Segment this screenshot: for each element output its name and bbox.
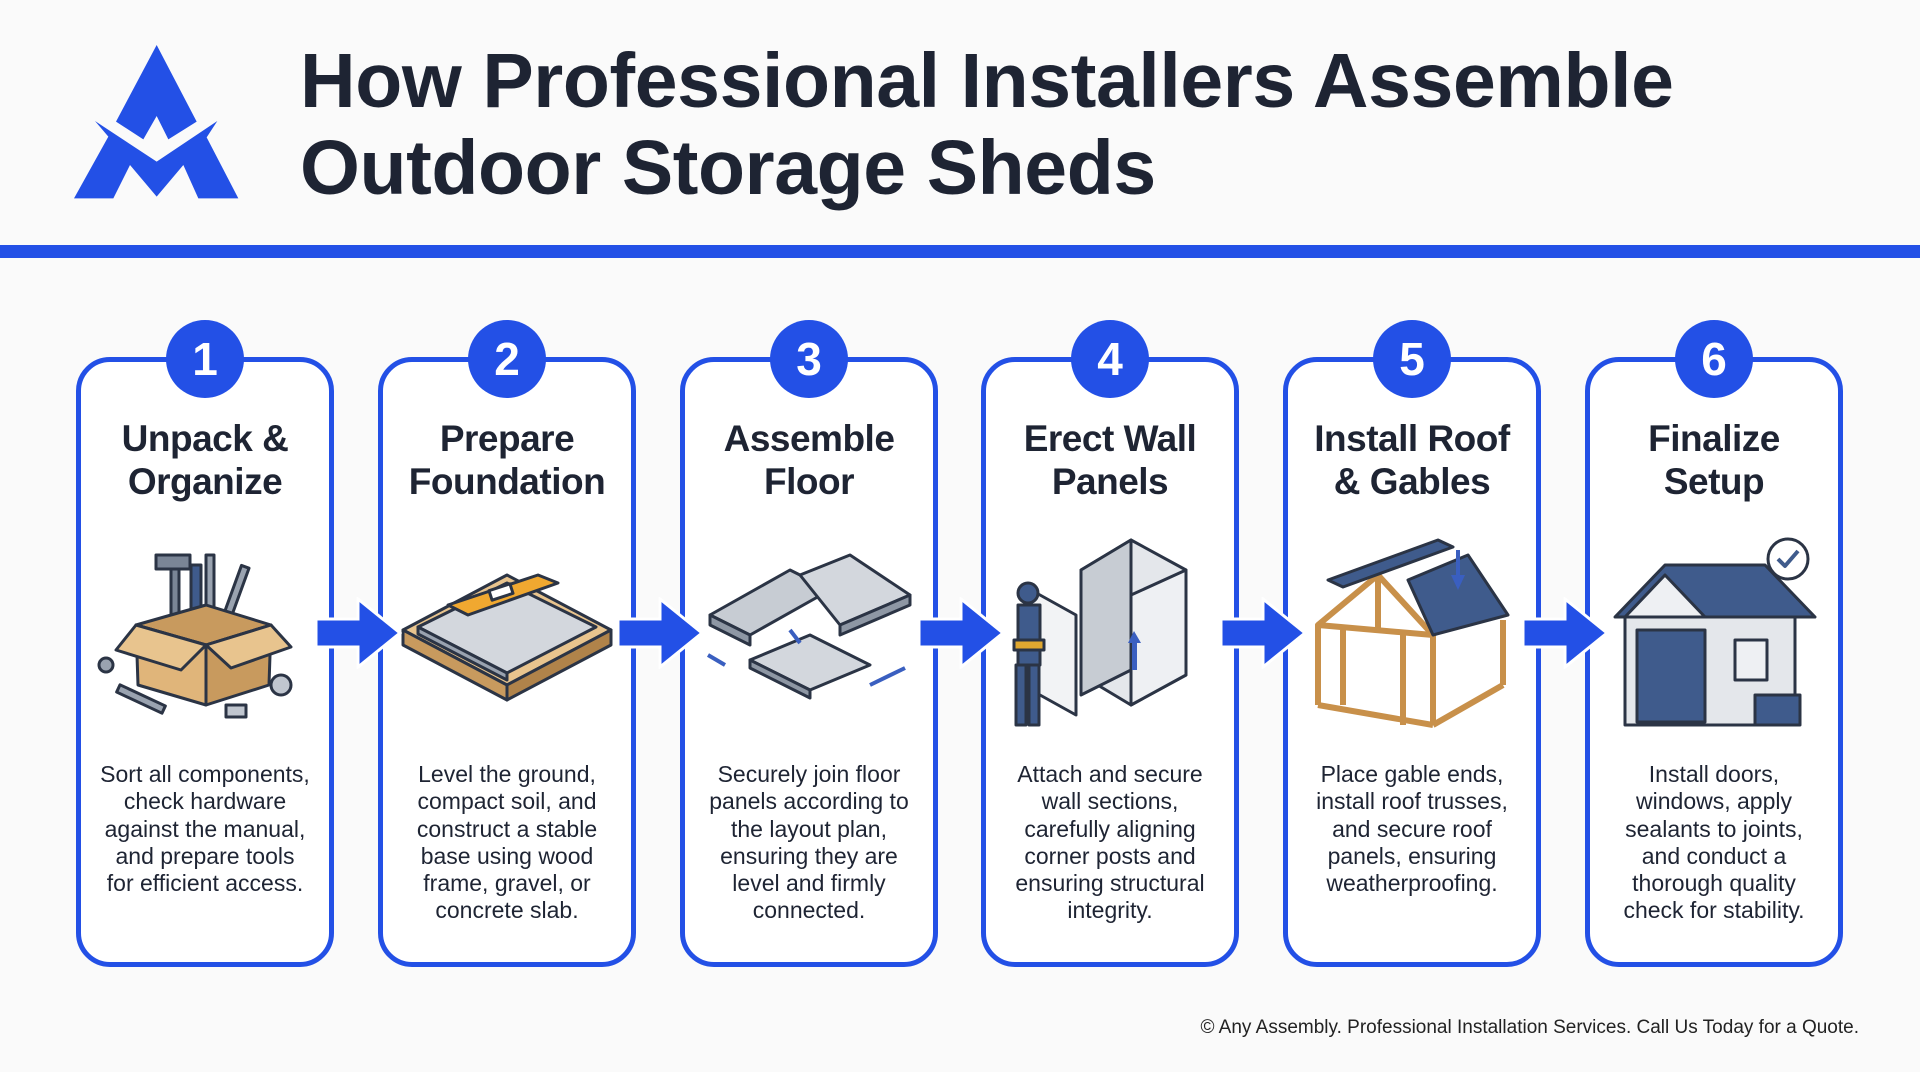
step number 5 <box>1373 320 1451 398</box>
arrow 5 <box>1524 602 1605 664</box>
description 5: panels, ensuring <box>1328 843 1496 869</box>
description 4: wall sections, <box>1042 788 1178 814</box>
step title 2 <box>409 418 605 502</box>
description 5: Place gable ends, <box>1321 761 1503 787</box>
step number 3 <box>770 320 848 398</box>
arrow 3 <box>920 602 1001 664</box>
description 2: concrete slab. <box>435 897 579 923</box>
description 5: and secure roof <box>1332 816 1492 842</box>
description 6: Install doors, <box>1649 761 1779 787</box>
description 3: the layout plan, <box>731 816 887 842</box>
description 3: ensuring they are <box>720 843 898 869</box>
description 5: weatherproofing. <box>1326 870 1498 896</box>
description 5 <box>1316 761 1508 896</box>
step title 1: Organize <box>128 461 282 502</box>
step number 5: 5 <box>1399 333 1425 385</box>
step title 6: Finalize <box>1648 418 1780 459</box>
step number 4 <box>1071 320 1149 398</box>
icon: foundation with level <box>401 574 613 702</box>
description 6: sealants to joints, <box>1625 816 1803 842</box>
step title 6: Setup <box>1664 461 1764 502</box>
description 6: check for stability. <box>1623 897 1805 923</box>
step title 2: Foundation <box>409 461 605 502</box>
icon: floor panels <box>707 554 912 700</box>
title <box>300 38 1674 211</box>
step title 1: Unpack & <box>122 418 288 459</box>
step number 2 <box>468 320 546 398</box>
description 3 <box>709 761 909 923</box>
panel: step 5 <box>1283 357 1541 967</box>
description 3: connected. <box>753 897 865 923</box>
description 4: Attach and secure <box>1017 761 1203 787</box>
description 1: for efficient access. <box>107 870 303 896</box>
step title 4 <box>1024 418 1196 502</box>
step title 5 <box>1314 418 1510 502</box>
description 3: Securely join floor <box>718 761 900 787</box>
description 2: compact soil, and <box>418 788 596 814</box>
step number 2: 2 <box>494 333 520 385</box>
description 1: against the manual, <box>105 816 305 842</box>
step title 5: Install Roof <box>1314 418 1510 459</box>
description 4 <box>1015 761 1205 923</box>
description 2: Level the ground, <box>418 761 596 787</box>
description 4: integrity. <box>1067 897 1153 923</box>
logo <box>74 45 238 198</box>
icon: roof trusses <box>1315 538 1510 728</box>
step number 6 <box>1675 320 1753 398</box>
description 6: thorough quality <box>1632 870 1796 896</box>
panel: step 2 <box>378 357 636 967</box>
icon: finished shed <box>1614 538 1817 726</box>
description 6 <box>1623 761 1805 923</box>
description 2: construct a stable <box>417 816 597 842</box>
step title 3 <box>724 418 894 502</box>
icon: box with tools <box>98 554 293 718</box>
description 1: and prepare tools <box>115 843 294 869</box>
description 2: frame, gravel, or <box>423 870 591 896</box>
step number 4: 4 <box>1097 333 1123 385</box>
arrow 2 <box>620 602 700 664</box>
step number 1: 1 <box>192 333 218 385</box>
panel: step 6 <box>1585 357 1843 967</box>
header rule <box>0 245 1920 258</box>
step number 3: 3 <box>796 333 822 385</box>
description 3: panels according to <box>709 788 909 814</box>
footer: © Any Assembly. Professional Installation Services. Call Us Today for a Quote. <box>1200 1017 1859 1038</box>
title: How Professional Installers Assemble <box>300 38 1674 124</box>
step title 1 <box>122 418 288 502</box>
description 2: base using wood <box>421 843 593 869</box>
step title 4: Panels <box>1052 461 1168 502</box>
panel: step 3 <box>680 357 938 967</box>
description 6: windows, apply <box>1636 788 1792 814</box>
description 2 <box>417 761 597 923</box>
panel: step 4 <box>981 357 1239 967</box>
description 1: Sort all components, <box>100 761 310 787</box>
step title 3: Assemble <box>724 418 894 459</box>
description 1: check hardware <box>124 788 286 814</box>
arrow 1 <box>318 602 402 664</box>
step title 3: Floor <box>764 461 854 502</box>
description 5: install roof trusses, <box>1316 788 1508 814</box>
step title 4: Erect Wall <box>1024 418 1196 459</box>
step title 5: & Gables <box>1334 461 1490 502</box>
description 4: corner posts and <box>1024 843 1196 869</box>
step title 2: Prepare <box>440 418 574 459</box>
icon: worker and walls <box>1012 538 1188 726</box>
description 3: level and firmly <box>732 870 886 896</box>
step number 6: 6 <box>1701 333 1727 385</box>
step title 6 <box>1648 418 1780 502</box>
description 1 <box>100 761 310 896</box>
title: Outdoor Storage Sheds <box>300 125 1156 211</box>
step number 1 <box>166 320 244 398</box>
description 4: carefully aligning <box>1024 816 1196 842</box>
arrow 4 <box>1222 602 1303 664</box>
description 4: ensuring structural <box>1015 870 1205 896</box>
description 6: and conduct a <box>1642 843 1786 869</box>
panel: step 1 <box>76 357 334 967</box>
